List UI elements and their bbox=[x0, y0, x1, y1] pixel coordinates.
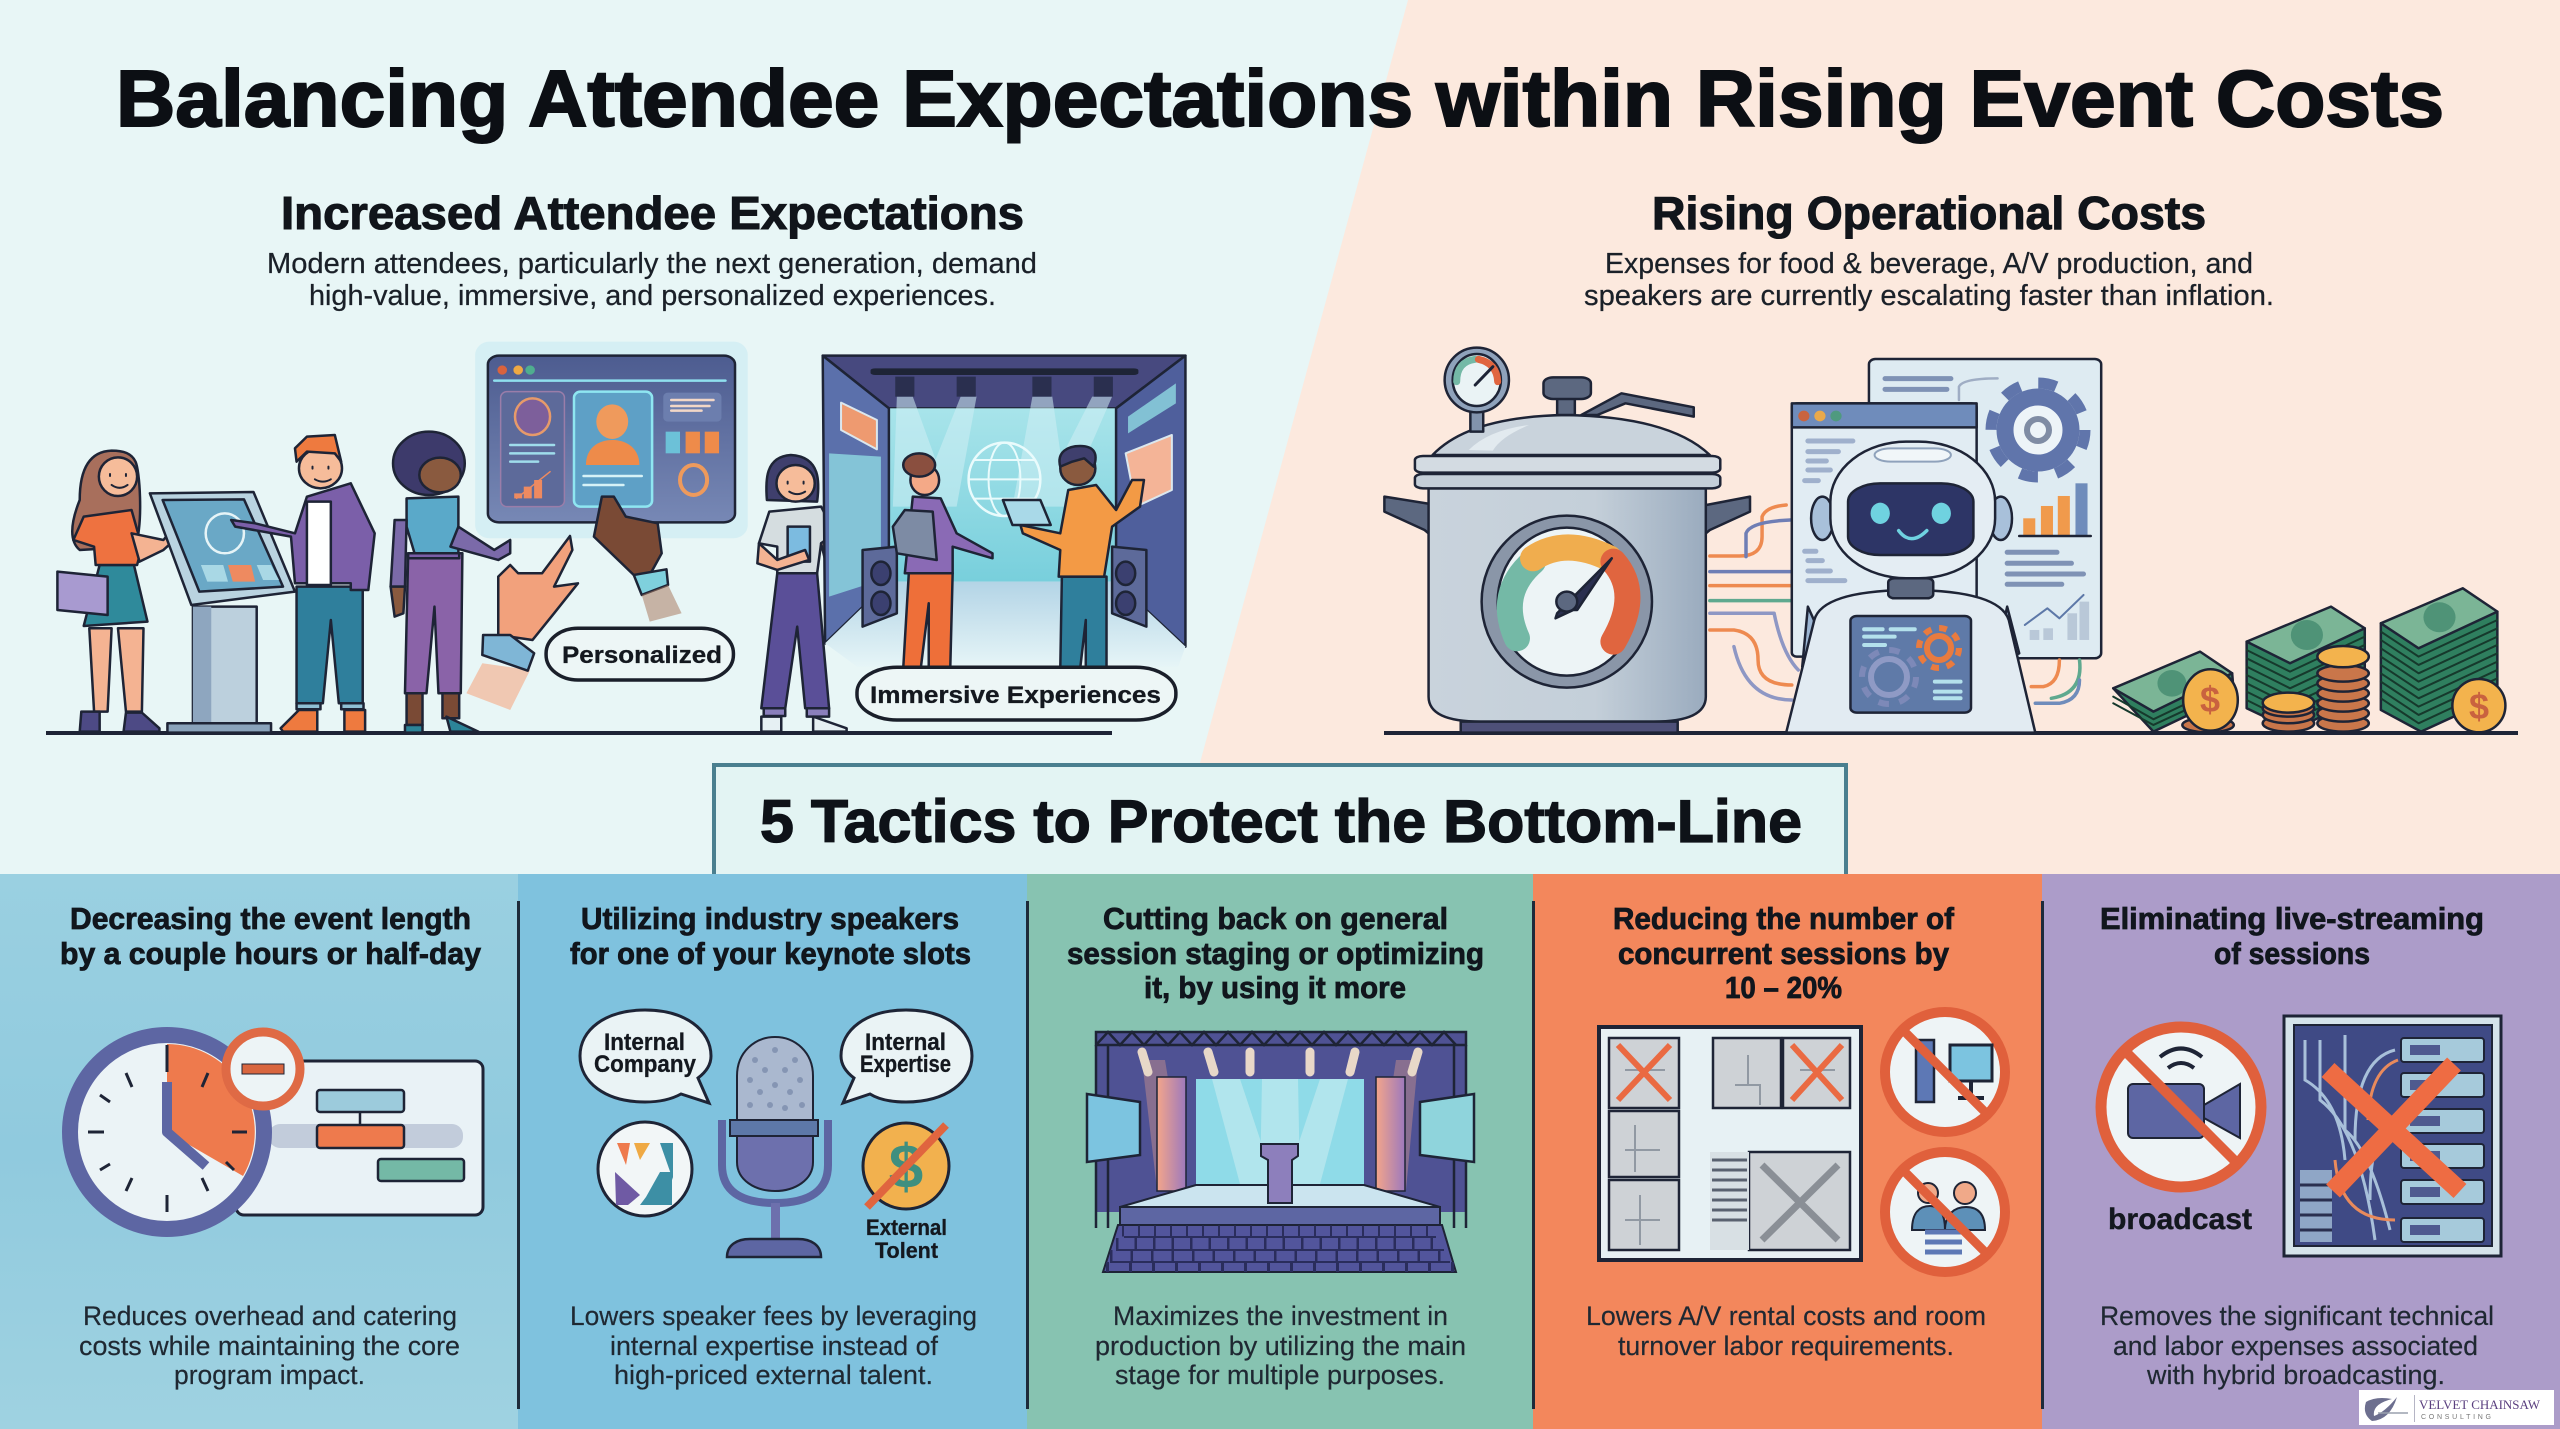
icon: crossed-out dollar: $ bbox=[889, 1133, 923, 1202]
text: tactic 4 benefit: turnover labor requirements. bbox=[1618, 1331, 1954, 1361]
heading: increased attendee expectations: Increased Attendee Expectations bbox=[281, 187, 1024, 239]
heading: tactic 5 bbox=[2100, 901, 2484, 971]
banner: 5 tactics bbox=[714, 765, 1846, 874]
person: visitor in orange sweater bbox=[1003, 446, 1144, 668]
pill: personalized bbox=[546, 628, 733, 680]
text: tactic 2 benefit: internal expertise instead of bbox=[610, 1331, 938, 1361]
text: tactic 5 benefit: Removes the significant technical bbox=[2100, 1301, 2494, 1331]
heading: tactic 2: for one of your keynote slots bbox=[570, 936, 971, 971]
person: visitor with backpack bbox=[893, 453, 993, 668]
person: woman with afro bbox=[391, 432, 510, 733]
panel: tactic 2 internal speakers bbox=[518, 874, 1027, 1429]
pill: immersive experiences bbox=[857, 667, 1176, 720]
icon: crossed-out dollar bbox=[863, 1123, 949, 1209]
text: tactic 3 benefit bbox=[1095, 1301, 1466, 1390]
title: Balancing Attendee Expectations within Rising Event Costs bbox=[116, 54, 2444, 143]
logo: velvet chainsaw consulting: CONSULTING bbox=[2421, 1414, 2491, 1421]
text: tactic 1 benefit bbox=[79, 1301, 460, 1390]
text: tactic 1 benefit: program impact. bbox=[174, 1360, 365, 1390]
heading: tactic 1: Decreasing the event length bbox=[70, 901, 471, 936]
label: broadcast: broadcast bbox=[2108, 1203, 2252, 1236]
bubble: internal company: Company bbox=[594, 1051, 697, 1078]
panel dividers bbox=[517, 901, 2044, 1409]
heading: tactic 5: of sessions bbox=[2214, 936, 2370, 971]
audience seats bbox=[1103, 1225, 1456, 1272]
text: tactic 3 benefit: Maximizes the investment in bbox=[1113, 1301, 1448, 1331]
icon: minus badge bbox=[226, 1032, 300, 1106]
text: tactic 3 benefit: production by utilizing the main bbox=[1095, 1331, 1466, 1361]
label: external talent: Tolent bbox=[875, 1238, 939, 1263]
heading: tactic 4 bbox=[1613, 901, 1955, 1005]
bubble: internal company bbox=[580, 1010, 711, 1103]
stage floor bbox=[1120, 1185, 1440, 1207]
panel: tactic 3 optimized staging bbox=[1027, 874, 1533, 1429]
icon: cash stack small bbox=[2113, 652, 2234, 732]
background: cost side bbox=[1168, 0, 2560, 880]
icon: timeline card bbox=[236, 1061, 483, 1215]
heading: tactic 1: by a couple hours or half-day bbox=[60, 936, 482, 971]
logo: velvet chainsaw consulting: VELVET CHAINSAW bbox=[2419, 1397, 2541, 1412]
heading: tactic 4: 10 – 20% bbox=[1725, 970, 1842, 1005]
text: tactic 5 benefit: with hybrid broadcasting. bbox=[2146, 1360, 2445, 1390]
icon: company logo bbox=[598, 1122, 692, 1216]
text block: costs description bbox=[1584, 248, 2274, 312]
icon: no staff bbox=[1885, 1152, 2005, 1272]
text block: costs description: Expenses for food & beverage, A/V production, and bbox=[1605, 248, 2253, 280]
text: tactic 5 benefit bbox=[2100, 1301, 2494, 1390]
gear on robot chest: grey bbox=[1862, 650, 1916, 704]
bubble: internal expertise bbox=[841, 1010, 972, 1103]
coin symbol right: $ bbox=[2469, 686, 2489, 727]
ground line left bbox=[46, 731, 1112, 735]
icon: peach hand with smartwatch bbox=[466, 536, 578, 710]
text: tactic 2 benefit: high-priced external talent. bbox=[614, 1360, 933, 1390]
ground line right bbox=[1384, 731, 2518, 735]
icon: brown hand with wristband bbox=[594, 497, 682, 622]
heading: tactic 4: concurrent sessions by bbox=[1618, 936, 1950, 971]
heading: tactic 2: Utilizing industry speakers bbox=[581, 901, 959, 936]
icon: no camera bbox=[2101, 1027, 2261, 1187]
illustration: attendees bbox=[46, 342, 1185, 735]
person: woman with tablet bbox=[757, 455, 869, 732]
text: tactic 4 benefit bbox=[1586, 1301, 1986, 1361]
icon: pressure cooker bbox=[1384, 348, 1750, 733]
text: tactic 4 benefit: Lowers A/V rental costs and room bbox=[1586, 1301, 1986, 1331]
person: man in purple jacket bbox=[231, 435, 375, 732]
bubble: internal company: Internal bbox=[604, 1029, 685, 1056]
panel: tactic 4 fewer concurrent sessions bbox=[1533, 874, 2042, 1429]
panel: back data window bbox=[1869, 359, 2101, 658]
text: tactic 2 benefit: Lowers speaker fees by leveraging bbox=[570, 1301, 977, 1331]
icon: coins bbox=[2182, 646, 2505, 732]
heading: tactic 1 bbox=[60, 901, 482, 971]
illustration: floor plan bbox=[1599, 1027, 1861, 1260]
icon: microphone bbox=[722, 1037, 828, 1257]
label: external talent: External bbox=[866, 1215, 947, 1240]
icon: cash stack medium bbox=[2247, 607, 2365, 730]
text block: attendee description: Modern attendees, particularly the next generation, demand bbox=[267, 248, 1037, 280]
text: tactic 1 benefit: costs while maintaining the core bbox=[79, 1331, 460, 1361]
heading: rising operational costs: Rising Operational Costs bbox=[1652, 187, 2206, 239]
heading: tactic 3 bbox=[1067, 901, 1484, 1005]
illustration: rising costs bbox=[1384, 348, 2518, 735]
text: tactic 5 benefit: and labor expenses associated bbox=[2113, 1331, 2478, 1361]
icon: no monitors bbox=[1885, 1012, 2005, 1132]
stage screen bbox=[1196, 1079, 1364, 1184]
text: tactic 3 benefit: stage for multiple purposes. bbox=[1115, 1360, 1445, 1390]
icon: cost pipes bbox=[1710, 505, 2080, 703]
lectern bbox=[1261, 1144, 1298, 1203]
illustration: stage bbox=[1087, 1032, 1474, 1272]
side screens bbox=[1087, 1094, 1140, 1162]
panel: tactic 1 shorter event bbox=[0, 874, 518, 1429]
illustration: immersive room bbox=[823, 356, 1185, 667]
gear on robot chest: orange bbox=[1919, 628, 1959, 668]
person: woman with bag bbox=[57, 451, 182, 732]
bubble: internal expertise: Expertise bbox=[860, 1051, 951, 1078]
kiosk bbox=[150, 492, 295, 733]
logo: velvet chainsaw consulting bbox=[2359, 1390, 2554, 1425]
text block: attendee description bbox=[267, 248, 1037, 312]
gear on back window bbox=[1991, 383, 2085, 477]
label: external talent bbox=[866, 1215, 947, 1263]
text block: costs description: speakers are currently escalating faster than inflation. bbox=[1584, 280, 2274, 312]
text block: attendee description: high-value, immersive, and personalized experiences. bbox=[309, 280, 996, 312]
illustration: crossed-out server rack bbox=[2284, 1016, 2501, 1256]
icon: robot bbox=[1786, 442, 2035, 733]
heading: tactic 3: it, by using it more bbox=[1144, 970, 1406, 1005]
label: personalized: Personalized bbox=[562, 642, 722, 669]
bubble: internal expertise: Internal bbox=[865, 1029, 946, 1056]
heading: tactic 3: Cutting back on general bbox=[1103, 901, 1448, 936]
screen: personalized dashboard bbox=[475, 342, 748, 538]
heading: tactic 4: Reducing the number of bbox=[1613, 901, 1955, 936]
coin symbol left: $ bbox=[2200, 679, 2220, 720]
text: tactic 1 benefit: Reduces overhead and catering bbox=[83, 1301, 457, 1331]
panel: front dashboard window bbox=[1792, 403, 1977, 657]
text: tactic 2 benefit bbox=[570, 1301, 977, 1390]
heading: tactic 2 bbox=[570, 901, 971, 971]
icon: clock bbox=[70, 1035, 264, 1229]
panel: tactic 5 no live-streaming bbox=[2042, 874, 2560, 1429]
icon: cash stack tall bbox=[2381, 588, 2497, 732]
heading: tactic 3: session staging or optimizing bbox=[1067, 936, 1484, 971]
heading: tactic 5: Eliminating live-streaming bbox=[2100, 901, 2484, 936]
banner: 5 tactics: 5 Tactics to Protect the Bottom-Line bbox=[760, 788, 1802, 855]
label: immersive experiences: Immersive Experiences bbox=[870, 682, 1161, 709]
